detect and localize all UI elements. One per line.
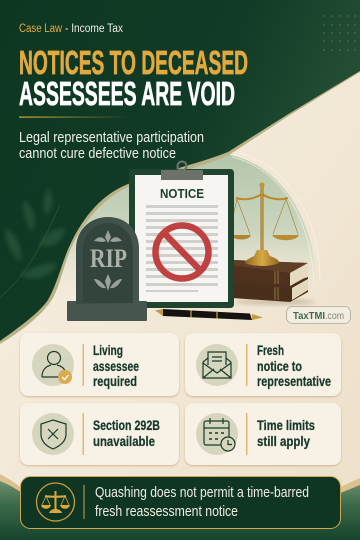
watermark badge: TaxTMI bbox=[293, 310, 325, 322]
title bbox=[19, 44, 248, 112]
card text: Section 292B bbox=[93, 417, 160, 433]
card text bbox=[257, 417, 315, 449]
upper book bbox=[232, 260, 308, 285]
paper bbox=[135, 175, 228, 302]
card text: Fresh bbox=[257, 342, 284, 358]
subtitle: Legal representative participation bbox=[19, 130, 204, 146]
category label bbox=[19, 23, 123, 35]
watermark badge: .com bbox=[325, 310, 344, 322]
category label: Case Law bbox=[19, 23, 63, 35]
illustration: fountain pen bbox=[155, 309, 263, 320]
sage brush swoosh bbox=[50, 153, 320, 300]
card text: still apply bbox=[257, 433, 310, 449]
card text: assessee bbox=[93, 358, 139, 374]
card text: required bbox=[93, 373, 137, 389]
card: time limits bbox=[185, 403, 341, 465]
icon: shield with x bbox=[32, 413, 74, 455]
card: section 292B bbox=[20, 403, 179, 465]
illustration: RIP gravestone bbox=[67, 217, 147, 321]
dark green header shape bbox=[0, 0, 360, 344]
top ornament bbox=[94, 230, 122, 243]
card text: Time limits bbox=[257, 417, 315, 433]
banner text bbox=[95, 484, 309, 520]
rip text: RIP bbox=[90, 244, 127, 273]
illustration: stacked books bbox=[232, 260, 315, 305]
card text bbox=[93, 342, 139, 389]
illustration: clipboard with notice bbox=[129, 162, 234, 308]
notice text lines bbox=[146, 205, 218, 292]
bottom ornament bbox=[94, 274, 122, 291]
subtitle: cannot cure defective notice bbox=[19, 146, 176, 162]
card text: representative bbox=[257, 373, 331, 389]
title rule bbox=[19, 116, 129, 118]
card text: Living bbox=[93, 342, 123, 358]
icon: person with check bbox=[32, 344, 74, 386]
illustration: balance scale bbox=[229, 182, 299, 266]
icon: scales in gold ring bbox=[36, 483, 74, 521]
notice heading: NOTICE bbox=[160, 186, 204, 201]
card: fresh notice bbox=[185, 333, 341, 396]
dot grid decoration bbox=[323, 15, 356, 51]
card text: notice to bbox=[257, 358, 302, 374]
banner text: fresh reassessment notice bbox=[95, 503, 238, 520]
icon: calendar with clock bbox=[196, 413, 238, 455]
card text bbox=[93, 417, 160, 449]
decorative leaves bbox=[6, 188, 66, 278]
subtitle bbox=[19, 130, 204, 162]
category label: - Income Tax bbox=[65, 23, 123, 35]
lower book bbox=[232, 277, 308, 302]
conclusion banner bbox=[20, 476, 340, 528]
watermark badge bbox=[286, 306, 350, 324]
prohibition sign bbox=[156, 226, 208, 278]
clip bbox=[161, 162, 203, 180]
card text: unavailable bbox=[93, 433, 155, 449]
card: living assessee bbox=[20, 333, 179, 396]
icon: open envelope bbox=[196, 344, 238, 386]
bottom green band bbox=[0, 474, 360, 540]
card text bbox=[257, 342, 331, 389]
banner text: Quashing does not permit a time-barred bbox=[95, 484, 309, 501]
